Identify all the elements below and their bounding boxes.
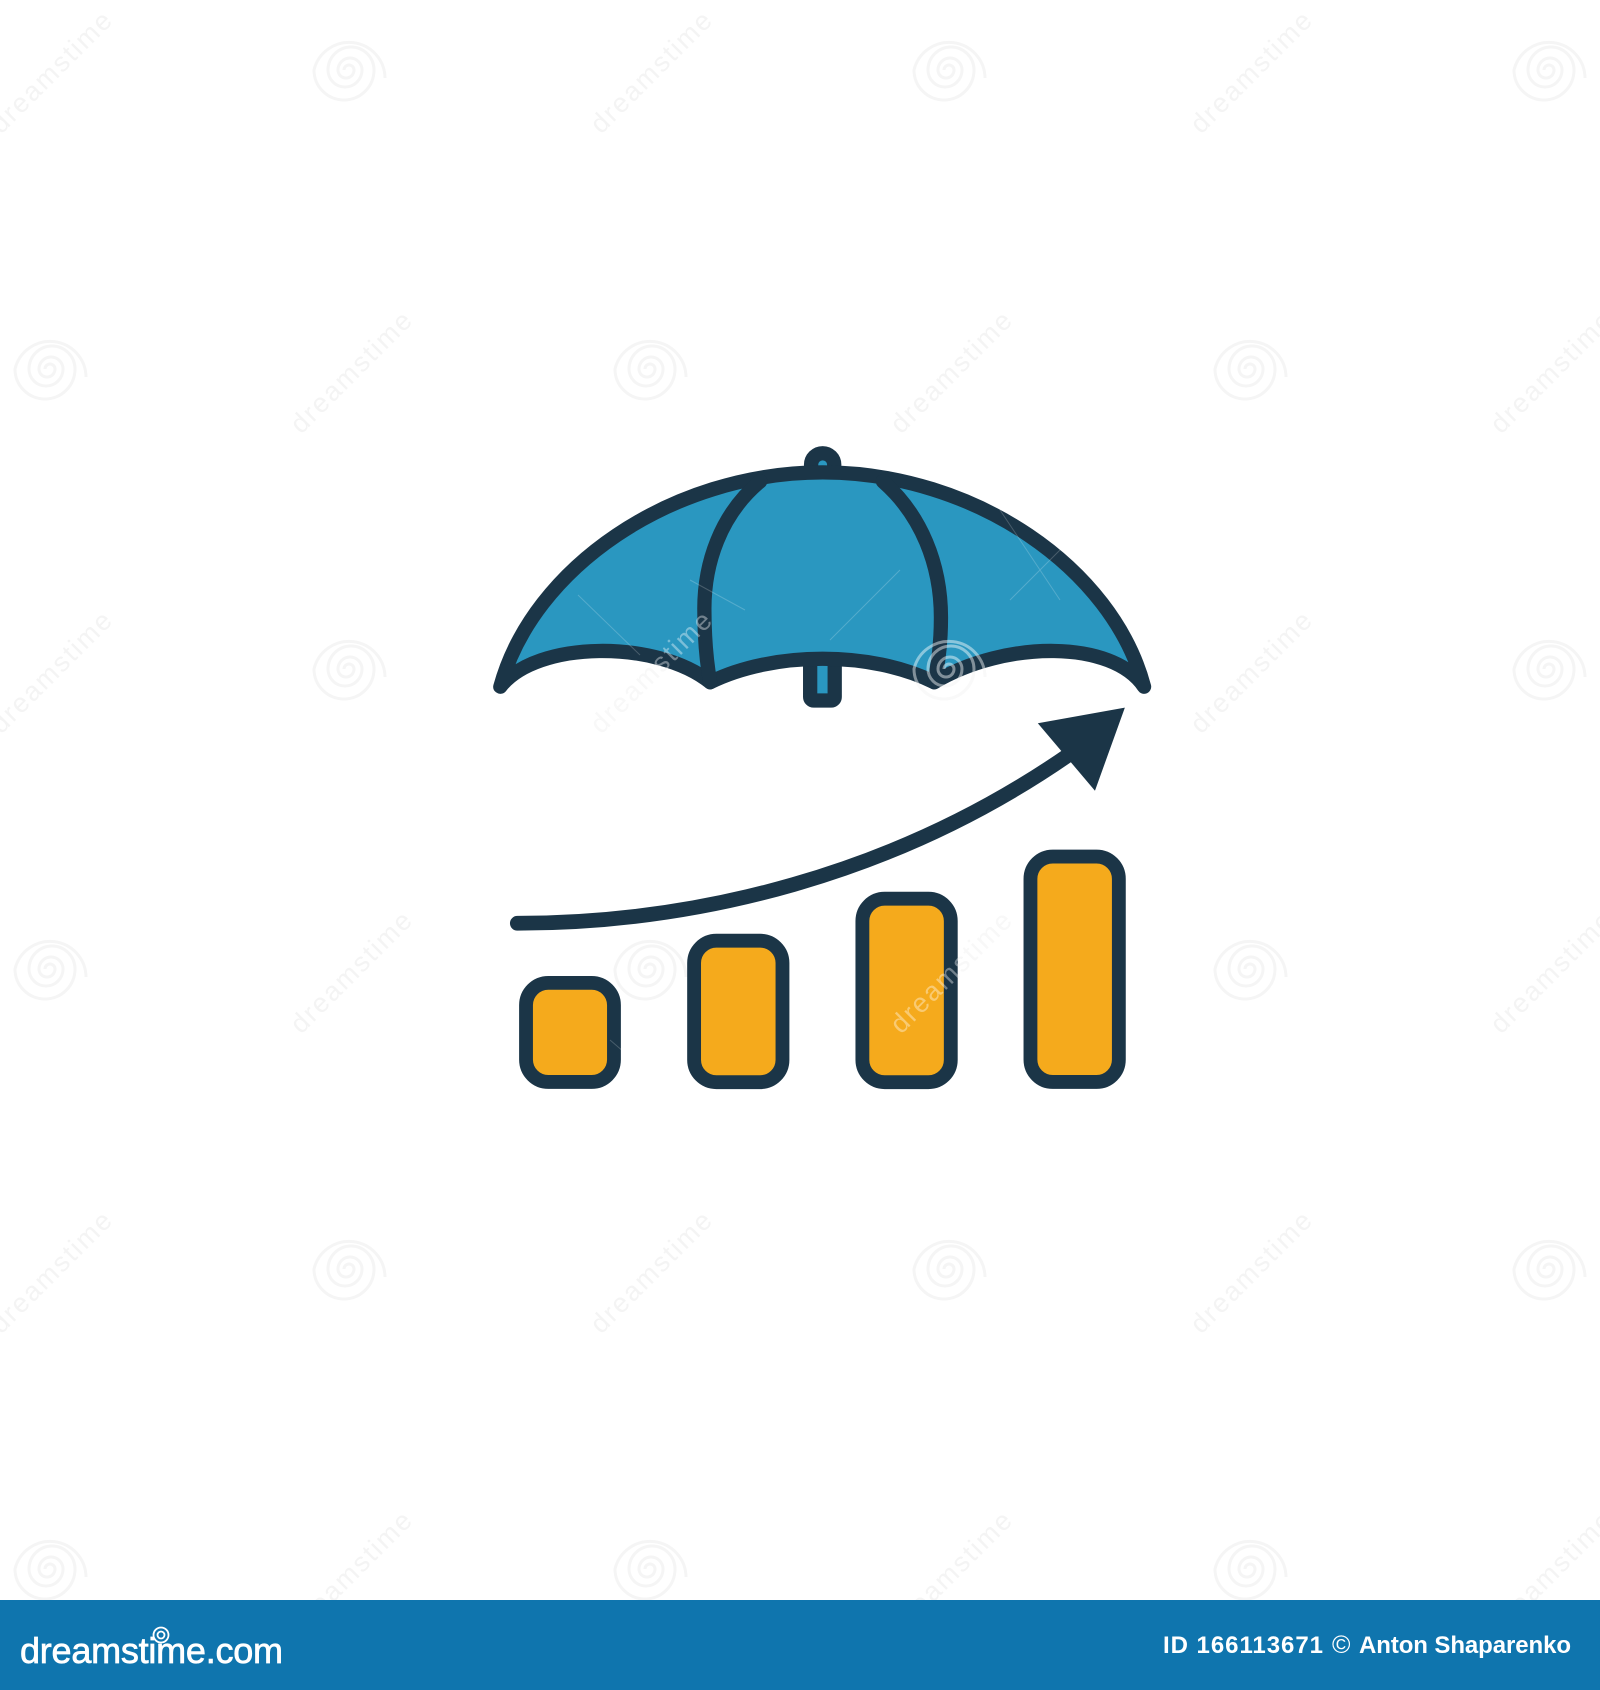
watermark layer: dreamstime [584, 1204, 719, 1339]
bar 1 [526, 983, 614, 1082]
umbrella handle [810, 655, 835, 701]
watermark layer: dreamstime [1184, 1204, 1319, 1339]
watermark layer: dreamstime [284, 904, 419, 1039]
watermark layer: dreamstime [584, 604, 719, 739]
icon: umbrella [500, 453, 1144, 701]
canopy left rib [704, 481, 760, 682]
bar 4 [1030, 857, 1119, 1082]
icon: umbrella over rising bar chart [500, 453, 1144, 1082]
image id and credit [1163, 1631, 1571, 1659]
watermark layer: dreamstime [284, 1504, 419, 1639]
image id and credit: © [1332, 1631, 1351, 1659]
bar 2 [694, 941, 782, 1082]
watermark layer: dreamstime [284, 304, 419, 439]
watermark overlay on icon: dreamstime [584, 604, 719, 739]
bar 3 [862, 899, 951, 1082]
watermark layer: dreamstime [1184, 604, 1319, 739]
watermark layer: dreamstime [1184, 4, 1319, 139]
watermark layer: dreamstime [884, 1504, 1019, 1639]
canopy right rib [883, 481, 941, 682]
image id and credit: Anton Shaparenko [1359, 1632, 1571, 1659]
umbrella canopy [500, 472, 1144, 687]
watermark layer: dreamstime [584, 4, 719, 139]
umbrella knob [811, 453, 834, 476]
watermark overlay on icon: dreamstime [884, 904, 1019, 1039]
watermark overlay on icon [578, 510, 1070, 1100]
logo: spiral mark [154, 1628, 168, 1642]
watermark layer: dreamstime [884, 904, 1019, 1039]
image id and credit: ID 166113671 [1163, 1632, 1323, 1659]
arrow: rising trend [517, 708, 1125, 923]
watermark layer: dreamstime [884, 304, 1019, 439]
logo text: dreamstime.com [20, 1630, 283, 1671]
bar chart: four rising bars [526, 857, 1119, 1082]
footer bar [0, 1600, 1600, 1690]
